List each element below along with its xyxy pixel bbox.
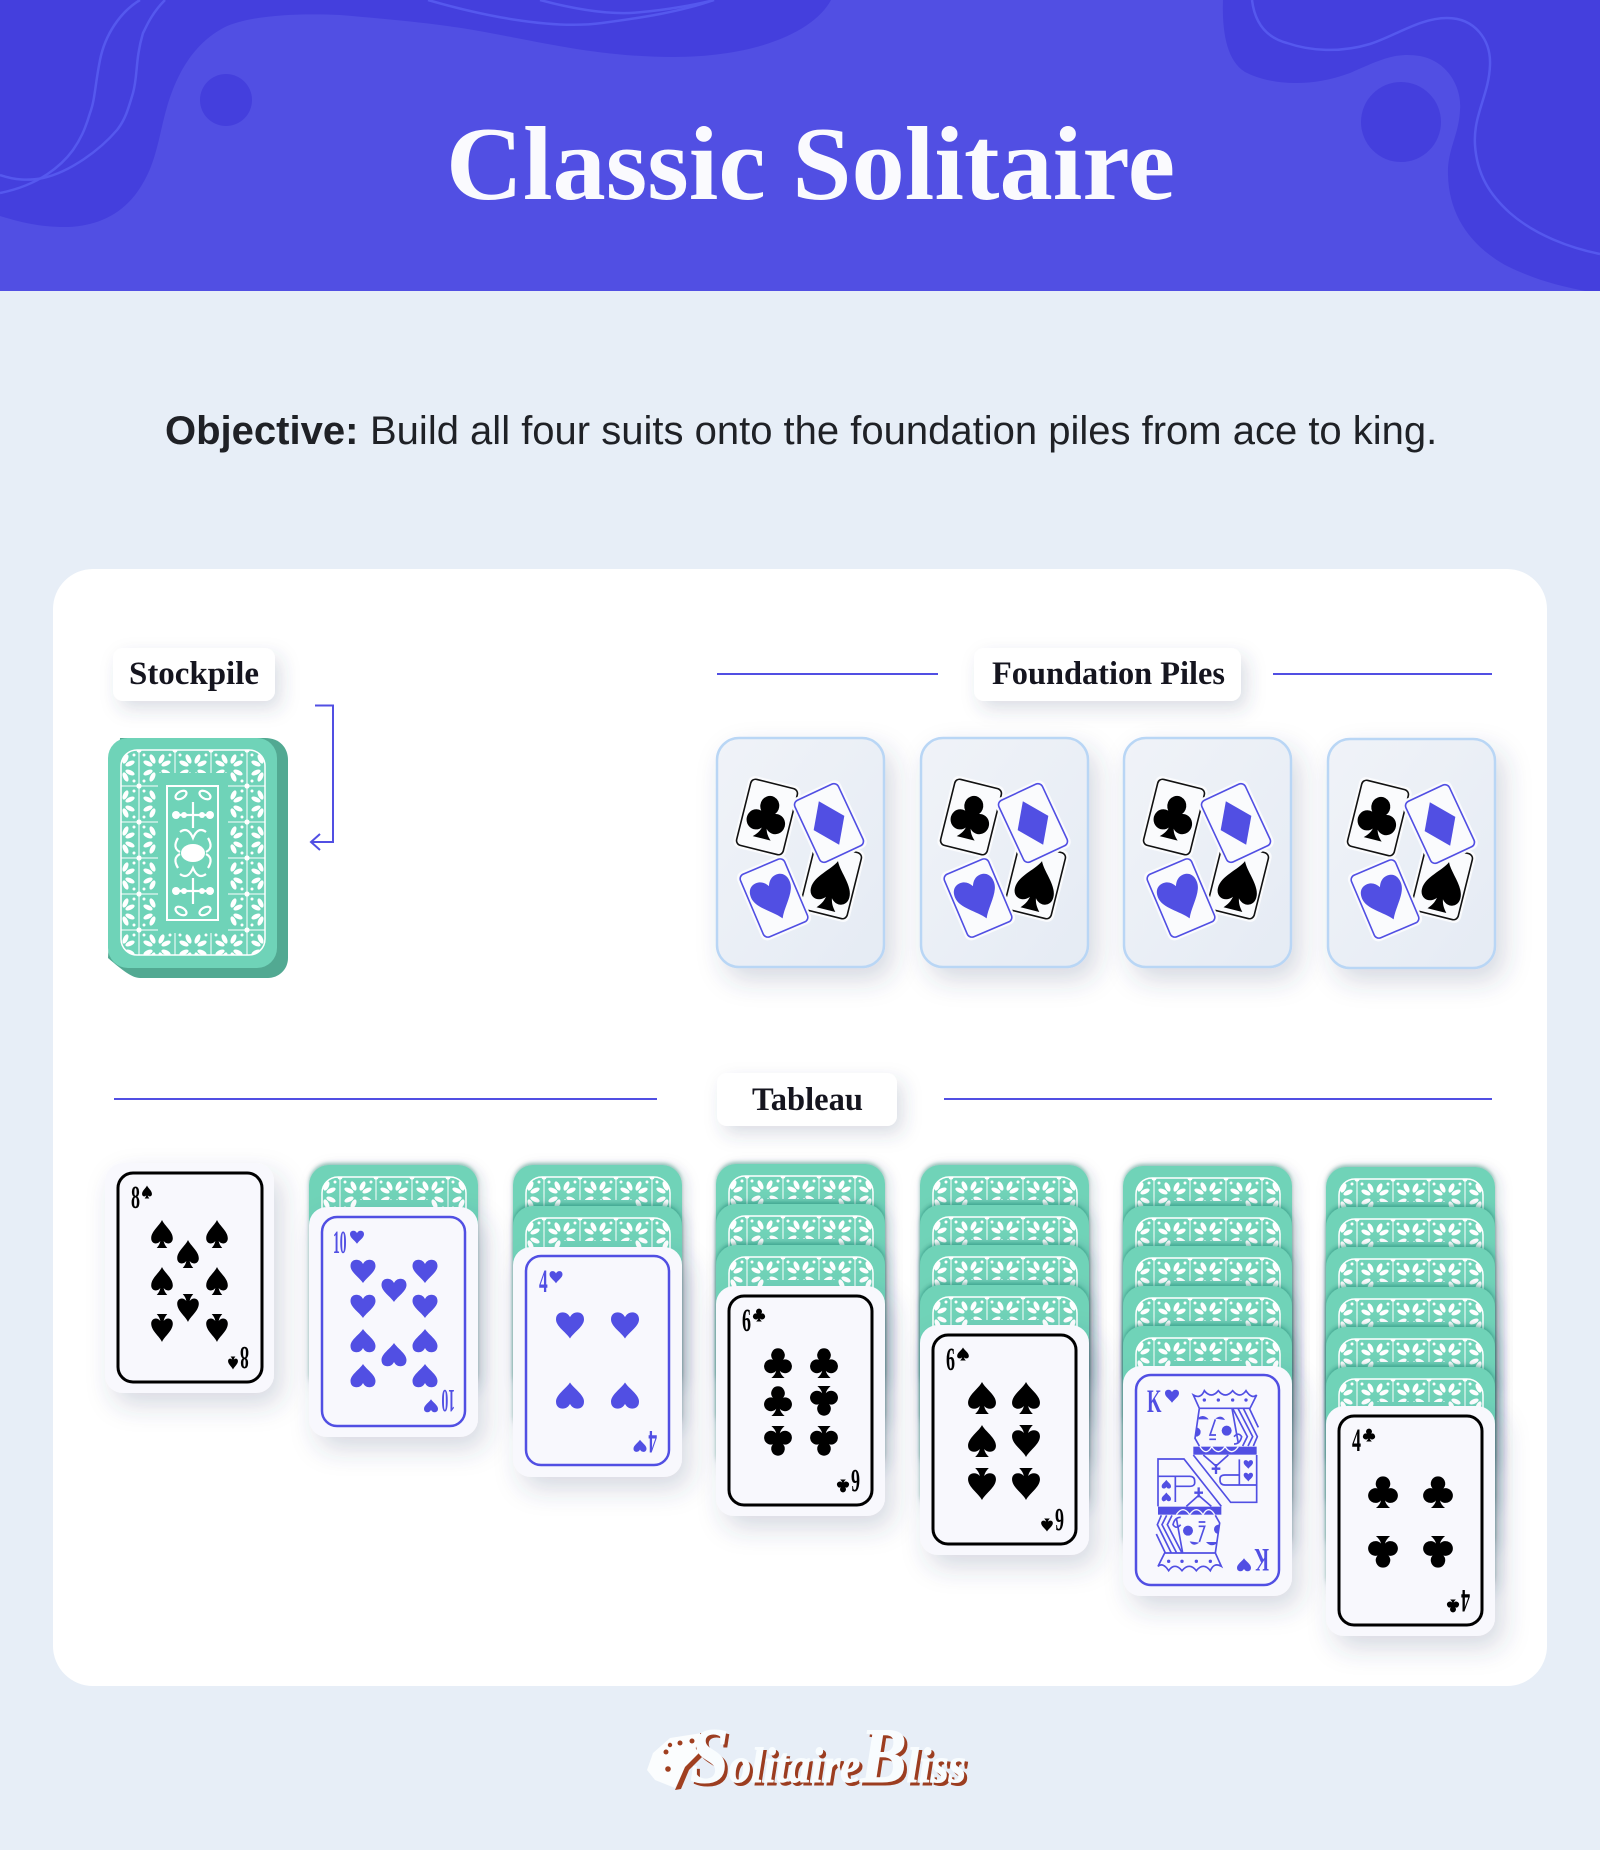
- tableau column 6: king of hearts: K: [1254, 1542, 1269, 1579]
- heading: tableau: [114, 1073, 1492, 1126]
- tableau column 4: six of clubs: 6: [742, 1301, 751, 1338]
- header banner: [0, 0, 1600, 291]
- tableau column 2: ten of hearts: 10: [333, 1226, 346, 1261]
- tableau column 1: eight of spades: 8: [131, 1178, 140, 1215]
- tableau column 6: king of hearts: K: [1147, 1382, 1162, 1419]
- tableau column 1: eight of spades: [105, 1163, 274, 1393]
- icon: king figure: [1156, 1391, 1258, 1571]
- heading: stockpile: [113, 648, 275, 701]
- stockpile deck: [108, 738, 288, 978]
- tableau column 7: four of clubs: 4: [1352, 1421, 1361, 1458]
- heading: foundation piles: [717, 648, 1492, 701]
- objective text: Build all four suits onto the foundation piles from ace to king.: [370, 409, 1437, 453]
- tableau column 5: six of spades: 6: [1055, 1502, 1064, 1539]
- tableau column 4: six of clubs: [716, 1164, 885, 1516]
- tableau column 3: four of hearts: 4: [539, 1263, 548, 1300]
- tableau column 7: four of clubs: 4: [1461, 1583, 1470, 1620]
- foundation pile 4: [1328, 739, 1495, 968]
- arrow: stockpile recycle: [311, 706, 333, 850]
- tableau column 3: four of hearts: 4: [648, 1423, 657, 1460]
- tableau column 2: ten of hearts: [309, 1165, 478, 1437]
- tableau column 1: eight of spades: 8: [240, 1340, 249, 1377]
- foundation pile 1: [717, 738, 884, 967]
- tableau column 3: four of hearts: [513, 1165, 682, 1477]
- panel: game board: [53, 569, 1547, 1686]
- heading: stockpile: Stockpile: [129, 656, 259, 692]
- heading: foundation piles: Foundation Piles: [992, 656, 1225, 692]
- tableau column 2: ten of hearts: 10: [442, 1382, 455, 1417]
- tableau column 5: six of spades: 6: [946, 1340, 955, 1377]
- heading: tableau: Tableau: [752, 1082, 863, 1118]
- tableau column 5: six of spades: [920, 1165, 1089, 1555]
- foundation pile 2: [921, 738, 1088, 967]
- objective text: Objective:: [165, 409, 358, 453]
- tableau column 6: king of hearts: [1123, 1166, 1292, 1596]
- foundation pile 3: [1124, 738, 1291, 967]
- icon: card fan: [647, 1733, 704, 1790]
- title: Classic Solitaire: [446, 105, 1175, 222]
- logo: Solitaire Bliss: SolitaireBliss: [690, 1712, 966, 1799]
- tableau column 4: six of clubs: 6: [851, 1463, 860, 1500]
- tableau column 7: four of clubs: [1326, 1167, 1495, 1636]
